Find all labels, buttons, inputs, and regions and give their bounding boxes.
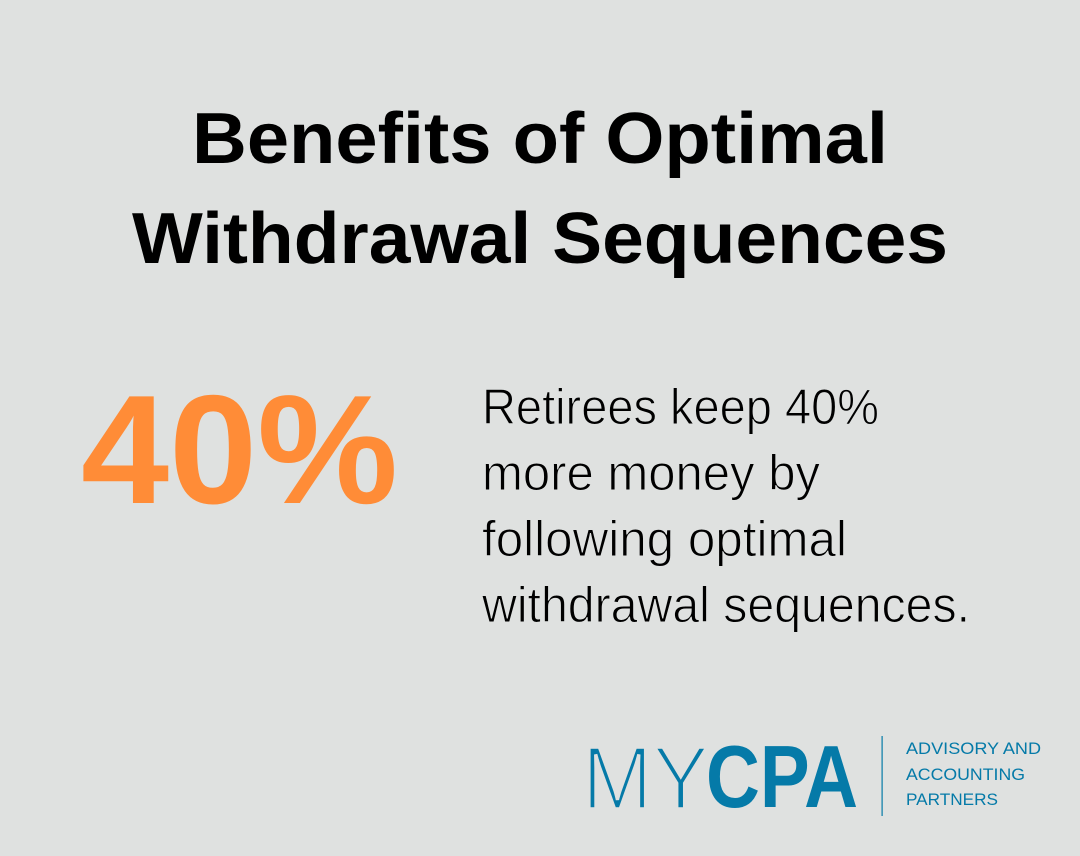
description text: following optimal	[482, 511, 847, 567]
logo divider	[882, 736, 883, 816]
logo wordmark: CPA	[706, 727, 858, 826]
title: Benefits of Optimal	[192, 99, 888, 179]
logo tagline	[906, 739, 1041, 809]
description text: Retirees keep 40%	[482, 379, 879, 435]
description text: withdrawal sequences.	[481, 577, 970, 633]
description text: more money by	[482, 445, 820, 501]
logo wordmark	[582, 727, 858, 829]
description text	[481, 379, 970, 633]
big statistic: 40%: 40%	[81, 363, 398, 536]
logo tagline: ADVISORY AND	[906, 739, 1041, 758]
logo wordmark: MY	[582, 729, 709, 829]
logo tagline: ACCOUNTING	[906, 765, 1025, 784]
logo: MYCPA advisory and accounting partners	[582, 727, 1041, 829]
logo tagline: PARTNERS	[906, 790, 998, 809]
title	[132, 99, 948, 279]
title: Withdrawal Sequences	[132, 199, 948, 279]
